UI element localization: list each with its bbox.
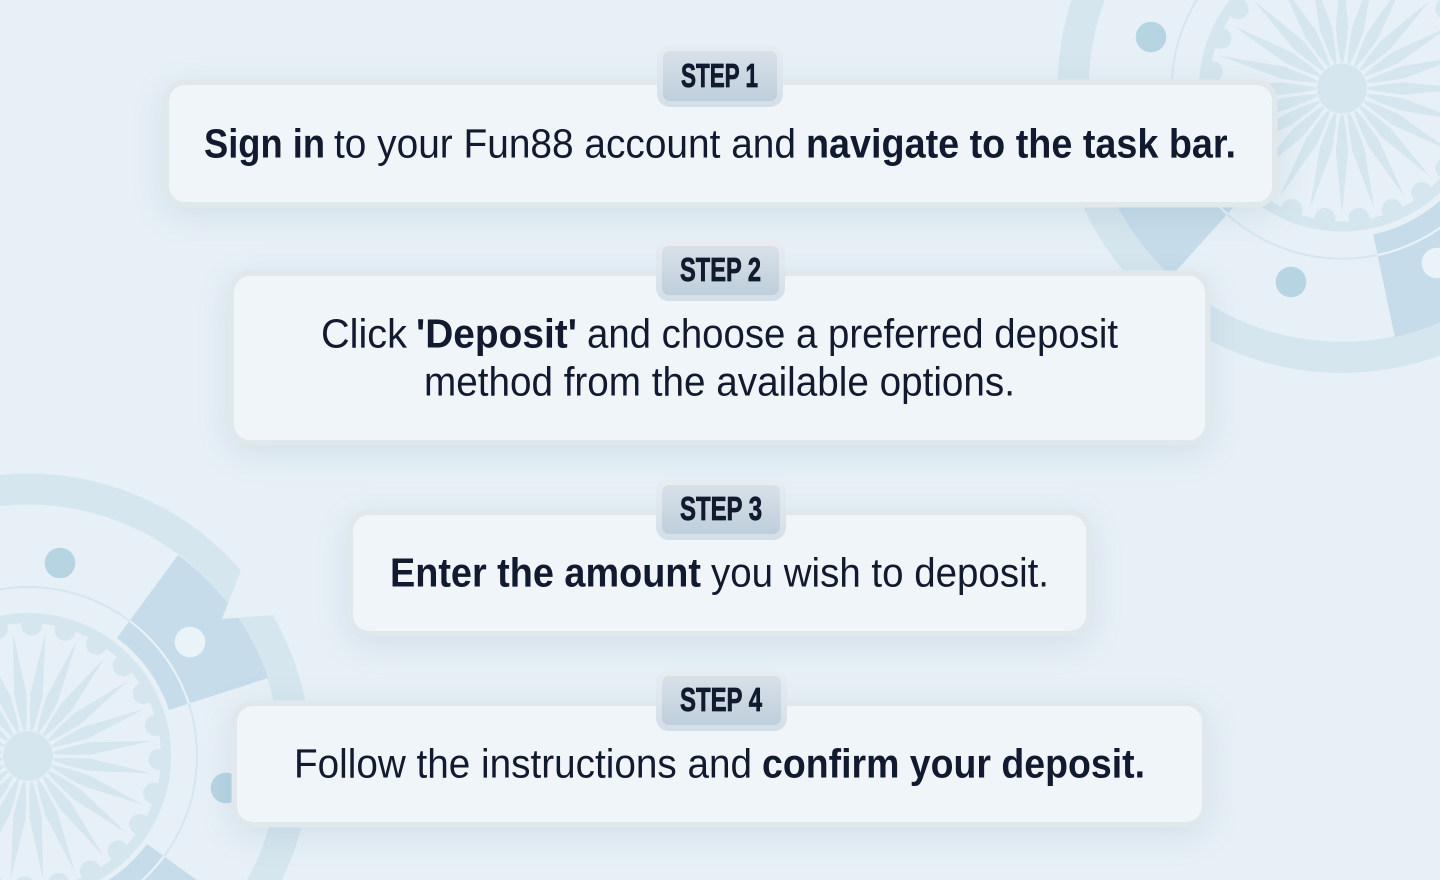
step 3 text: STEP 3 [680, 490, 762, 527]
step 2 text: STEP 2 [680, 251, 761, 288]
panel: step 1 [158, 51, 1282, 220]
step 1 text [204, 57, 1236, 166]
step 4 text [294, 681, 1145, 786]
chakra wheel: top right [1046, 0, 1440, 384]
step 4 text: confirm your deposit. [762, 740, 1145, 786]
decorative dots [45, 22, 1306, 803]
step 2 text: 'Deposit' [416, 310, 577, 356]
step 2 text: method from the available options. [424, 358, 1015, 404]
segment holes [175, 248, 1440, 657]
chakra wheel: bottom left [0, 489, 295, 880]
step 4 text: STEP 4 [680, 681, 762, 718]
step 3 text: Enter the amount [390, 550, 701, 596]
step 4 text: Follow the instructions and [294, 740, 752, 786]
panel: step 3 [342, 485, 1096, 650]
step 3 text [390, 490, 1049, 596]
step 2 text: and choose a preferred deposit [587, 310, 1118, 356]
step 2 text [321, 251, 1118, 404]
step 1 text: Sign in [204, 120, 325, 166]
step 2 text: Click [321, 310, 408, 356]
step 1 text: STEP 1 [681, 57, 758, 94]
step 1 text: to your Fun88 account and [334, 120, 796, 166]
step 3 text: you wish to deposit. [711, 550, 1049, 596]
step 1 text: navigate to the task bar. [806, 120, 1236, 166]
panel: step 2 [224, 246, 1216, 458]
panel: step 4 [226, 676, 1212, 840]
